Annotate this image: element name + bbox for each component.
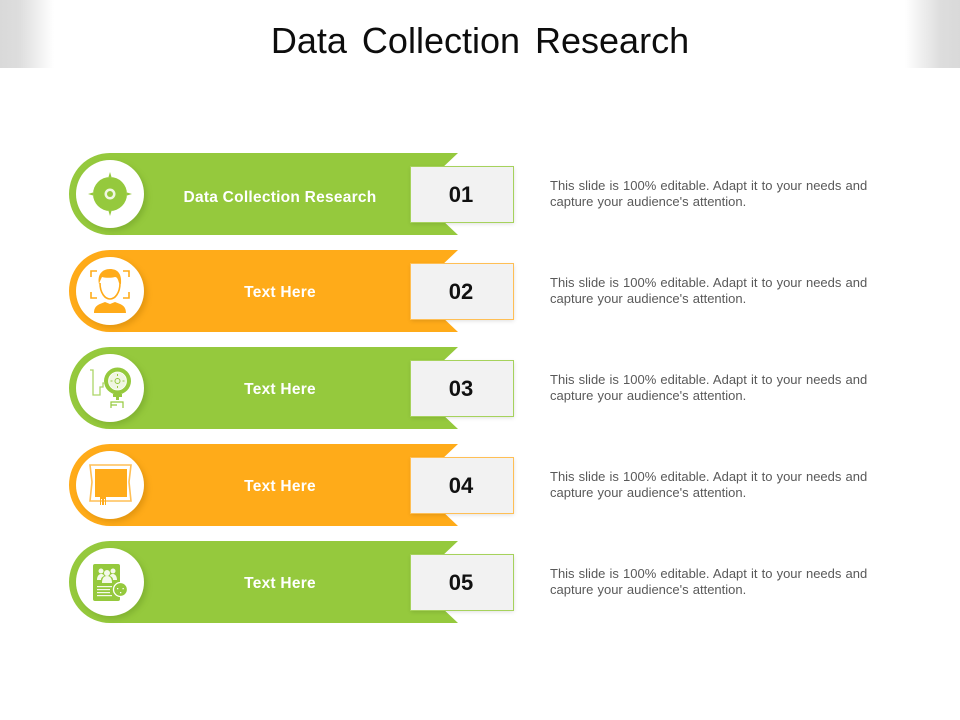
description 02: This slide is 100% editable. Adapt it to your needs and [550, 275, 867, 290]
number box 04 [410, 458, 514, 515]
row 02 [69, 250, 867, 332]
icon: survey document [93, 564, 128, 601]
ribbon 02 [69, 250, 458, 332]
header corner shade: left [0, 0, 54, 68]
ribbon 01 [69, 153, 458, 235]
label 03: Text Here [244, 381, 316, 398]
icon: sign board [90, 465, 131, 505]
number box 02 [410, 264, 514, 321]
number box 02: 02 [449, 279, 473, 304]
description 04 [550, 469, 867, 500]
icon circle 02 [76, 257, 147, 328]
description 04: capture your audience's attention. [550, 485, 746, 500]
number box 01 [410, 166, 514, 224]
ribbon 05 [69, 541, 458, 623]
description 04: This slide is 100% editable. Adapt it to your needs and [550, 469, 867, 484]
icon circle 05 [76, 548, 147, 619]
description 05 [550, 566, 867, 597]
description 05: capture your audience's attention. [550, 582, 746, 597]
description 02 [550, 275, 867, 306]
icon: face scan [91, 269, 129, 313]
description 02: capture your audience's attention. [550, 291, 746, 306]
header corner shade: right [905, 0, 960, 68]
row 03 [69, 347, 867, 429]
number box 05: 05 [449, 570, 473, 595]
number box 05 [410, 554, 514, 612]
icon: target [88, 172, 132, 216]
description 01: This slide is 100% editable. Adapt it to your needs and [550, 178, 867, 193]
label 01: Data Collection Research [184, 189, 376, 206]
icon circle 03 [76, 354, 147, 425]
description 05: This slide is 100% editable. Adapt it to your needs and [550, 566, 867, 581]
icon circle 04 [76, 451, 147, 522]
icon circle 01 [76, 160, 147, 231]
description 01 [550, 178, 867, 209]
ribbon 04 [69, 444, 458, 526]
number box 04: 04 [449, 473, 474, 498]
row 04 [69, 444, 867, 526]
description 01: capture your audience's attention. [550, 194, 746, 209]
label 04: Text Here [244, 478, 316, 495]
ribbon 03 [69, 347, 458, 429]
description 03 [550, 372, 867, 403]
title: Data Collection Research [271, 20, 689, 61]
row 05 [69, 541, 867, 623]
description 03: This slide is 100% editable. Adapt it to your needs and [550, 372, 867, 387]
number box 03: 03 [449, 376, 473, 401]
label 02: Text Here [244, 284, 316, 301]
row 01 [69, 153, 867, 235]
label 05: Text Here [244, 575, 316, 592]
number box 01: 01 [449, 182, 473, 207]
description 03: capture your audience's attention. [550, 388, 746, 403]
number box 03 [410, 360, 514, 418]
icon: valve gauge [90, 368, 131, 408]
